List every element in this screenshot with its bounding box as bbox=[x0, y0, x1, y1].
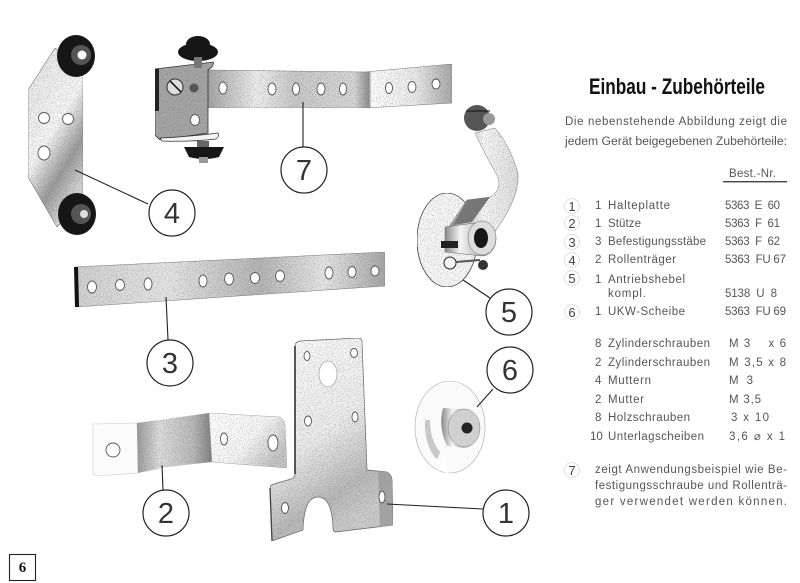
hardware list: 4 bbox=[595, 375, 602, 387]
parts list: 1 bbox=[595, 306, 601, 318]
parts list: Befestigungsstäbe bbox=[608, 236, 706, 248]
parts list: Antriebshebel bbox=[608, 274, 685, 286]
page number box: 6 bbox=[19, 560, 27, 576]
note on part 7: zeigt Anwendungsbeispiel wie Be- bbox=[595, 464, 787, 476]
order number heading bbox=[723, 168, 787, 182]
part 1: holding plate bbox=[270, 338, 393, 541]
hardware list: Zylinderschrauben bbox=[608, 338, 710, 350]
leader line and number 7: 7 bbox=[296, 155, 312, 187]
leader line and number 5: 5 bbox=[501, 297, 517, 329]
note on part 7: 7 bbox=[568, 463, 576, 478]
parts list: 1 bbox=[595, 218, 601, 230]
intro text bbox=[564, 116, 787, 148]
hardware list: M 3,5 bbox=[729, 394, 761, 406]
parts list: Stütze bbox=[608, 218, 641, 230]
parts list: 5 bbox=[568, 271, 576, 286]
part 2: support bbox=[93, 413, 287, 476]
hardware list: Zylinderschrauben bbox=[608, 357, 710, 369]
hardware list: M 3 bbox=[729, 375, 753, 387]
hardware list: M 3 x 6 bbox=[729, 338, 786, 350]
hardware list: 8 bbox=[595, 412, 601, 424]
parts list: 6 bbox=[568, 305, 576, 320]
parts list: 3 bbox=[595, 236, 601, 248]
hardware list: Unterlagscheiben bbox=[608, 431, 704, 443]
leader line and number 5 bbox=[463, 280, 532, 335]
parts list: 5363 FU 69 bbox=[725, 306, 786, 318]
leader line and number 1: 1 bbox=[498, 498, 514, 530]
parts list: 1 bbox=[595, 274, 601, 286]
leader line and number 3 bbox=[147, 297, 193, 386]
parts list: 5138 U 8 bbox=[725, 288, 777, 300]
parts list bbox=[564, 198, 786, 320]
page number box bbox=[10, 554, 36, 580]
leader line and number 2: 2 bbox=[158, 498, 174, 530]
hardware list: 2 bbox=[595, 394, 601, 406]
part 7: assembled bracket example bbox=[155, 36, 452, 163]
leader line and number 3: 3 bbox=[162, 348, 178, 380]
intro text: Die nebenstehende Abbildung zeigt die bbox=[565, 116, 787, 128]
parts list: 5363 F 62 bbox=[725, 236, 780, 248]
intro text: jedem Gerät beigegebenen Zubehörteile: bbox=[564, 136, 787, 148]
note on part 7: festigungsschraube und Rollenträ- bbox=[595, 480, 787, 492]
parts list: 4 bbox=[568, 253, 576, 268]
note on part 7 bbox=[564, 462, 787, 508]
hardware list: Holzschrauben bbox=[608, 412, 690, 424]
parts list: 1 bbox=[595, 200, 601, 212]
parts list: 2 bbox=[568, 216, 576, 231]
parts list: kompl. bbox=[608, 288, 646, 300]
leader line and number 6 bbox=[477, 347, 533, 407]
part 6: UKW disc bbox=[415, 381, 485, 474]
leader line and number 7 bbox=[281, 102, 327, 193]
leader line and number 1 bbox=[387, 490, 529, 536]
parts list: 5363 E 60 bbox=[725, 200, 780, 212]
parts list: 1 bbox=[568, 199, 576, 214]
hardware list: 2 bbox=[595, 357, 601, 369]
hardware list: Muttern bbox=[608, 375, 651, 387]
hardware list: Mutter bbox=[608, 394, 644, 406]
parts list: 3 bbox=[568, 235, 576, 250]
hardware list bbox=[590, 338, 786, 443]
hardware list: 3 x 10 bbox=[731, 412, 769, 424]
parts list: 5363 FU 67 bbox=[725, 254, 786, 266]
leader line and number 4: 4 bbox=[164, 198, 180, 230]
part 3: fixing bar bbox=[74, 252, 385, 307]
part 4: roller carrier bbox=[28, 35, 96, 235]
hardware list: 10 bbox=[590, 431, 603, 443]
hardware list: 8 bbox=[595, 338, 601, 350]
parts list: Rollenträger bbox=[608, 254, 676, 266]
note on part 7: ger verwendet werden können. bbox=[595, 496, 787, 508]
hardware list: M 3,5 x 8 bbox=[729, 357, 786, 369]
leader line and number 2 bbox=[143, 465, 189, 536]
hardware list: 3,6 ⌀ x 1 bbox=[729, 431, 785, 443]
leader line and number 6: 6 bbox=[502, 355, 518, 387]
part 5: drive lever bbox=[417, 105, 518, 287]
leader line and number 4 bbox=[75, 170, 195, 236]
parts list: UKW-Scheibe bbox=[608, 306, 685, 318]
parts list: Halteplatte bbox=[608, 200, 670, 212]
parts list: 2 bbox=[595, 254, 601, 266]
order number heading: Best.-Nr. bbox=[729, 168, 776, 180]
parts list: 5363 F 61 bbox=[725, 218, 780, 230]
